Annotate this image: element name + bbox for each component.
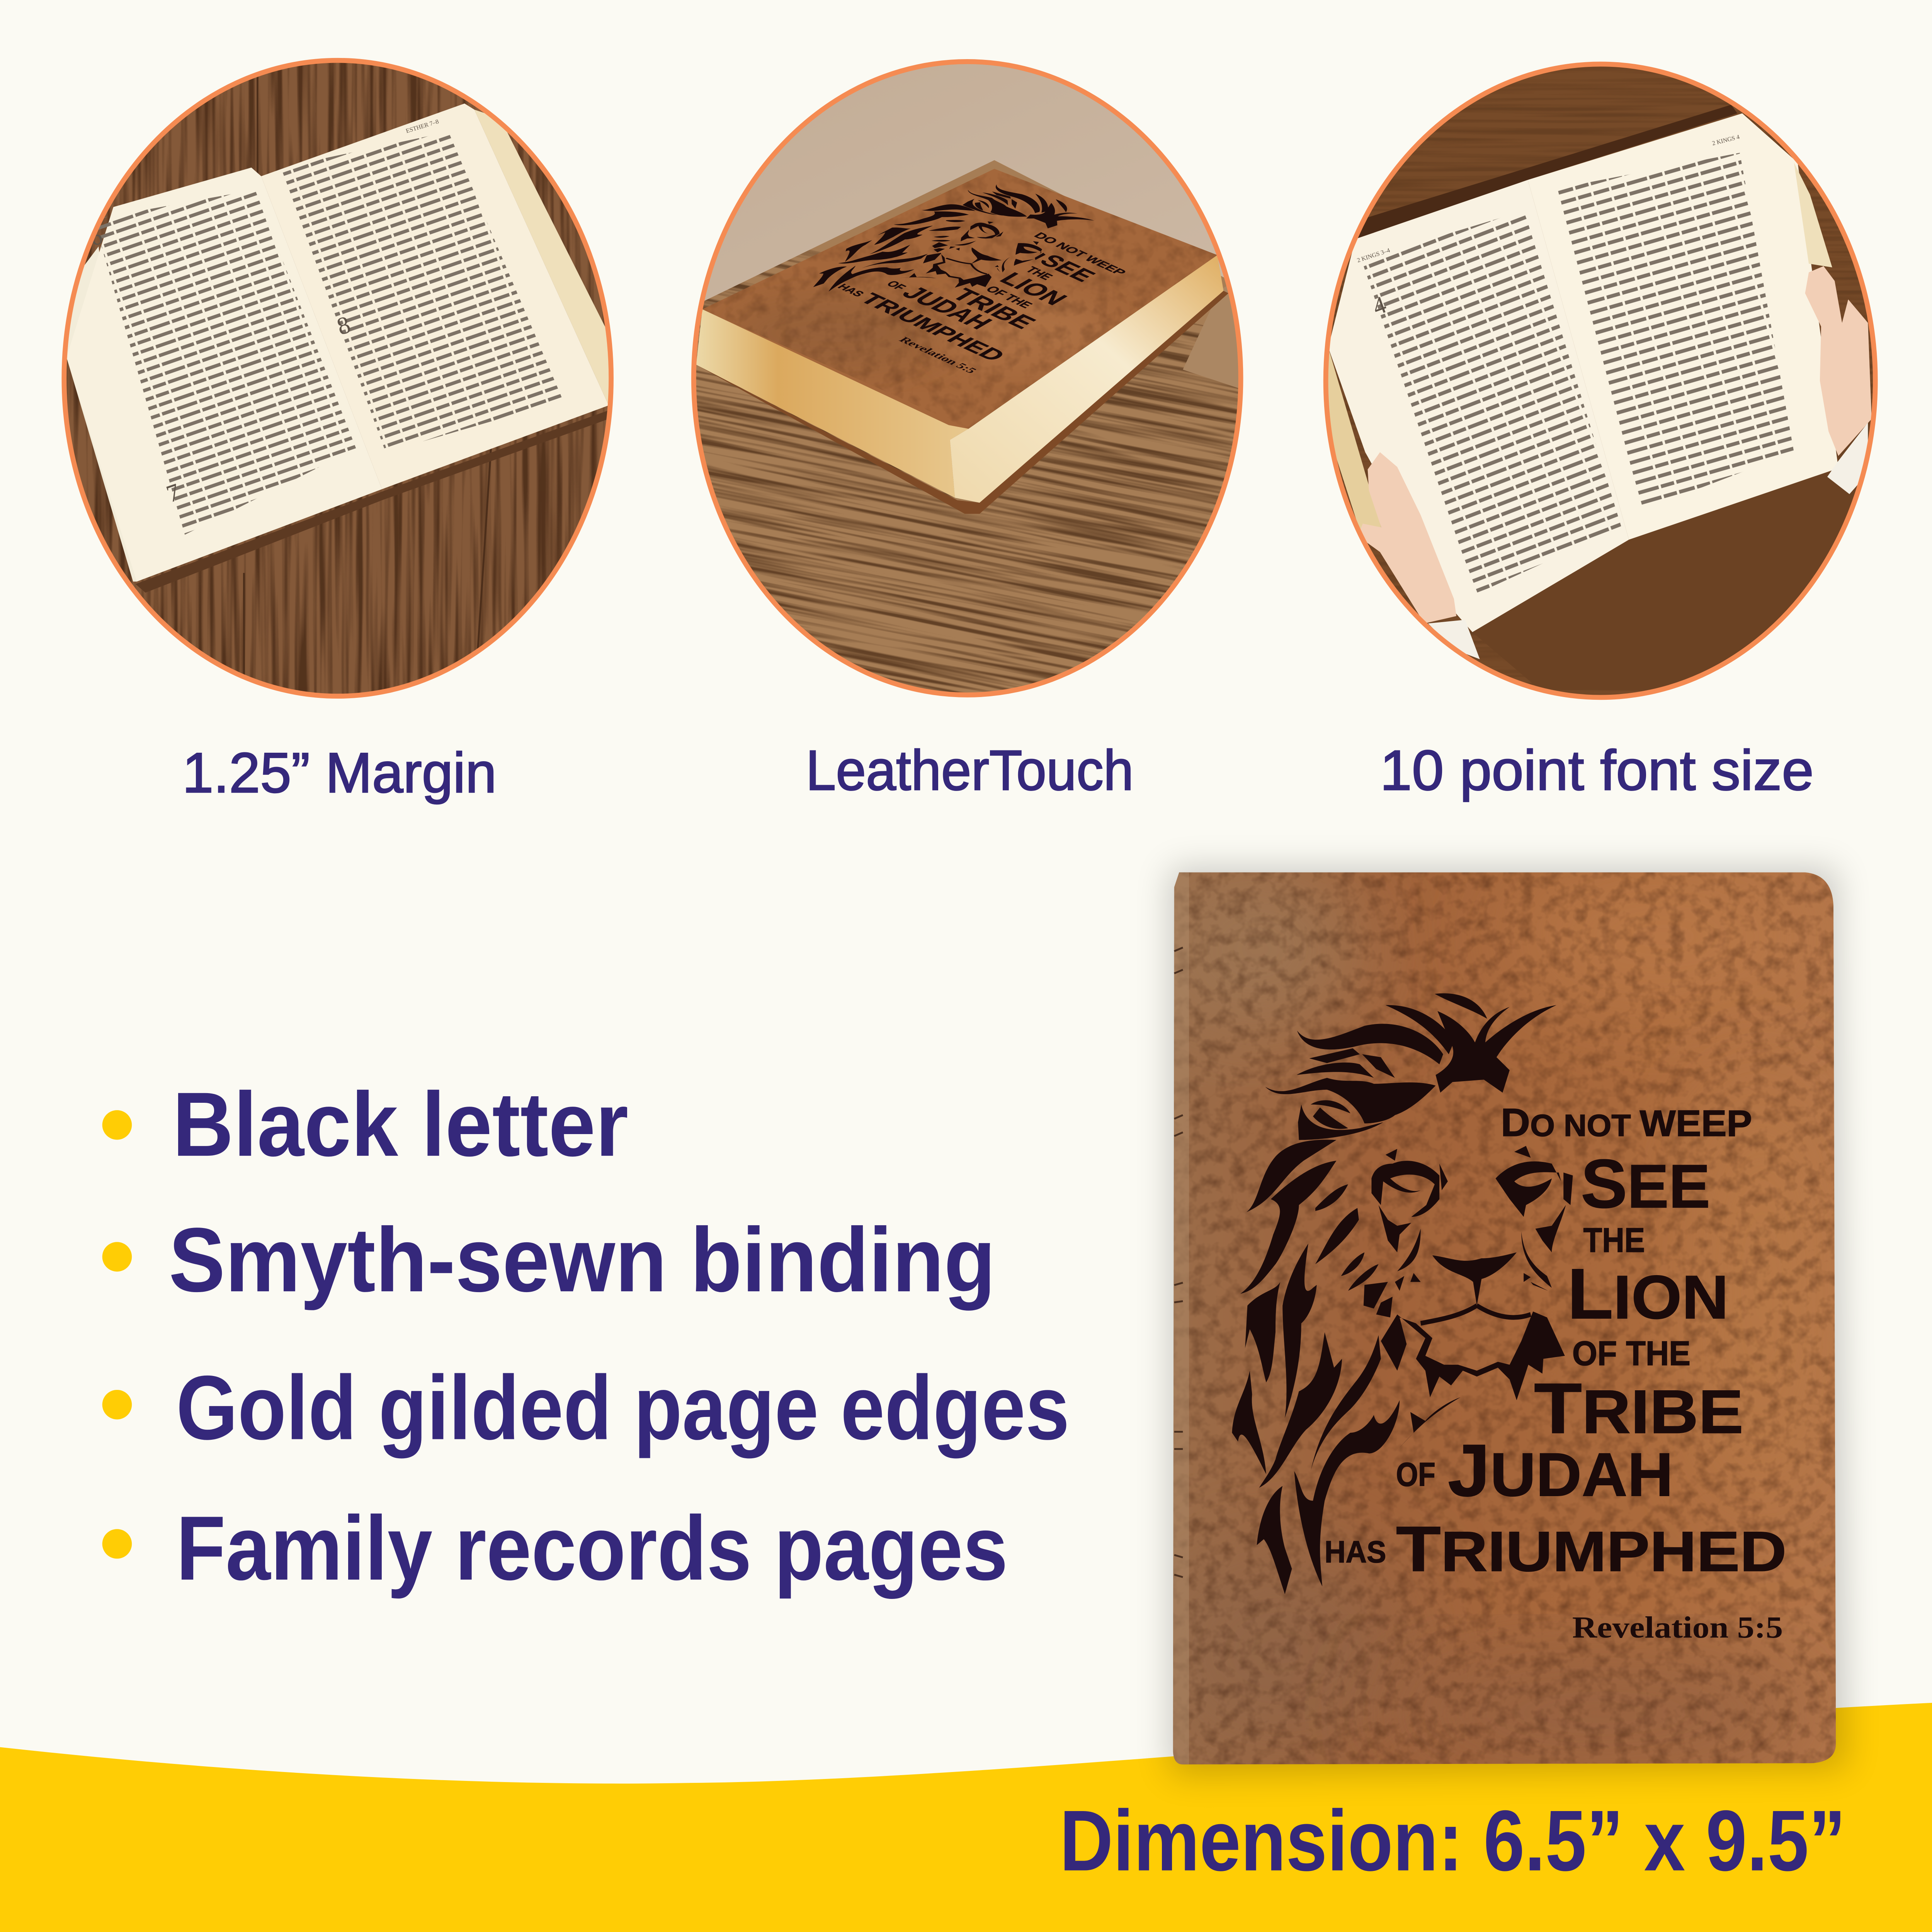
- cover wording: JUDAH: [1448, 1429, 1673, 1512]
- mini lion: [795, 167, 1104, 333]
- left page: [1328, 180, 1629, 632]
- page detail: [1356, 134, 1740, 320]
- cover wording: T RIUMPHED: [1396, 1514, 1787, 1585]
- label: font size: 10 point font size: [1380, 739, 1814, 802]
- mini cover wording: JUDAH: [896, 282, 999, 333]
- gilded edge, right: [1794, 163, 1832, 267]
- yellow wave band: [0, 1703, 1932, 1932]
- mini cover wording: OF THE: [982, 284, 1035, 310]
- mini cover wording: LION: [993, 269, 1073, 309]
- cover wording: OF THE: [1572, 1334, 1690, 1372]
- spine ridges: [1174, 947, 1183, 1577]
- page detail: 7: [163, 478, 184, 508]
- left hand: [1358, 452, 1456, 624]
- circle photo: leathertouch cover: [568, 49, 1352, 838]
- cover wording: Revelation 5:5: [1572, 1611, 1783, 1645]
- cover wording: TRIBE: [1534, 1369, 1743, 1449]
- bullet: family records pages: Family records pages: [176, 1497, 1008, 1599]
- page detail: 2 KINGS 3–4: [1356, 247, 1391, 264]
- page detail: 6: [85, 221, 106, 252]
- page edge, spine side: [696, 309, 968, 498]
- bullet: black letter: Black letter: [172, 1073, 628, 1175]
- page detail: 2 KINGS 4: [1711, 134, 1740, 147]
- feature list: [102, 1073, 1070, 1599]
- gilded edge, left: [1326, 347, 1384, 536]
- mini cover wording: TRIUMPHED: [855, 290, 1011, 364]
- circle photo: hands holding bible: [1306, 49, 1898, 714]
- page detail: 4: [1369, 291, 1390, 320]
- cover wording: OF: [1396, 1456, 1435, 1493]
- lion illustration: [1232, 993, 1573, 1594]
- right hand: [1805, 266, 1872, 456]
- bullet: smyth-sewn binding: Smyth-sewn binding: [169, 1209, 996, 1311]
- cover wording: THE: [1583, 1221, 1645, 1259]
- cover wording: [1325, 1100, 1787, 1645]
- mini cover wording: DO NOT WEEP: [1031, 231, 1129, 277]
- mini cover wording: [811, 203, 1141, 376]
- mini cover wording: SEE: [1034, 251, 1101, 285]
- dark book board behind pages: [1355, 105, 1737, 239]
- cover wording: DO NOT WEEP: [1501, 1100, 1752, 1145]
- circle photo: open bible with margin: [49, 49, 628, 714]
- page detail: [85, 118, 440, 508]
- cover leather: [702, 169, 1218, 429]
- book cover: [1146, 850, 1846, 1774]
- left cuff: [1428, 620, 1480, 659]
- mini cover wording: Revelation 5:5: [896, 335, 980, 375]
- mini cover wording: TRIBE: [946, 285, 1042, 332]
- bullet: gold gilded page edges: Gold gilded page edges: [176, 1357, 1070, 1459]
- label: margin: 1.25” Margin: [182, 741, 497, 804]
- mini cover wording: OF: [884, 279, 909, 292]
- cover wording: SEE: [1581, 1145, 1710, 1222]
- page edge, fore side: [950, 255, 1223, 503]
- mini cover wording: HAS: [835, 282, 867, 298]
- page detail: 8: [333, 311, 354, 340]
- mini cover wording: THE: [1022, 265, 1056, 282]
- cover wording: HAS: [1325, 1534, 1386, 1569]
- page detail: ESTHER 7–8: [405, 118, 440, 134]
- right page: [1528, 113, 1838, 540]
- right cuff: [1827, 423, 1868, 494]
- cover wording: LION: [1567, 1254, 1729, 1334]
- book bottom board: [696, 291, 1228, 514]
- label: leathertouch: LeatherTouch: [806, 739, 1134, 802]
